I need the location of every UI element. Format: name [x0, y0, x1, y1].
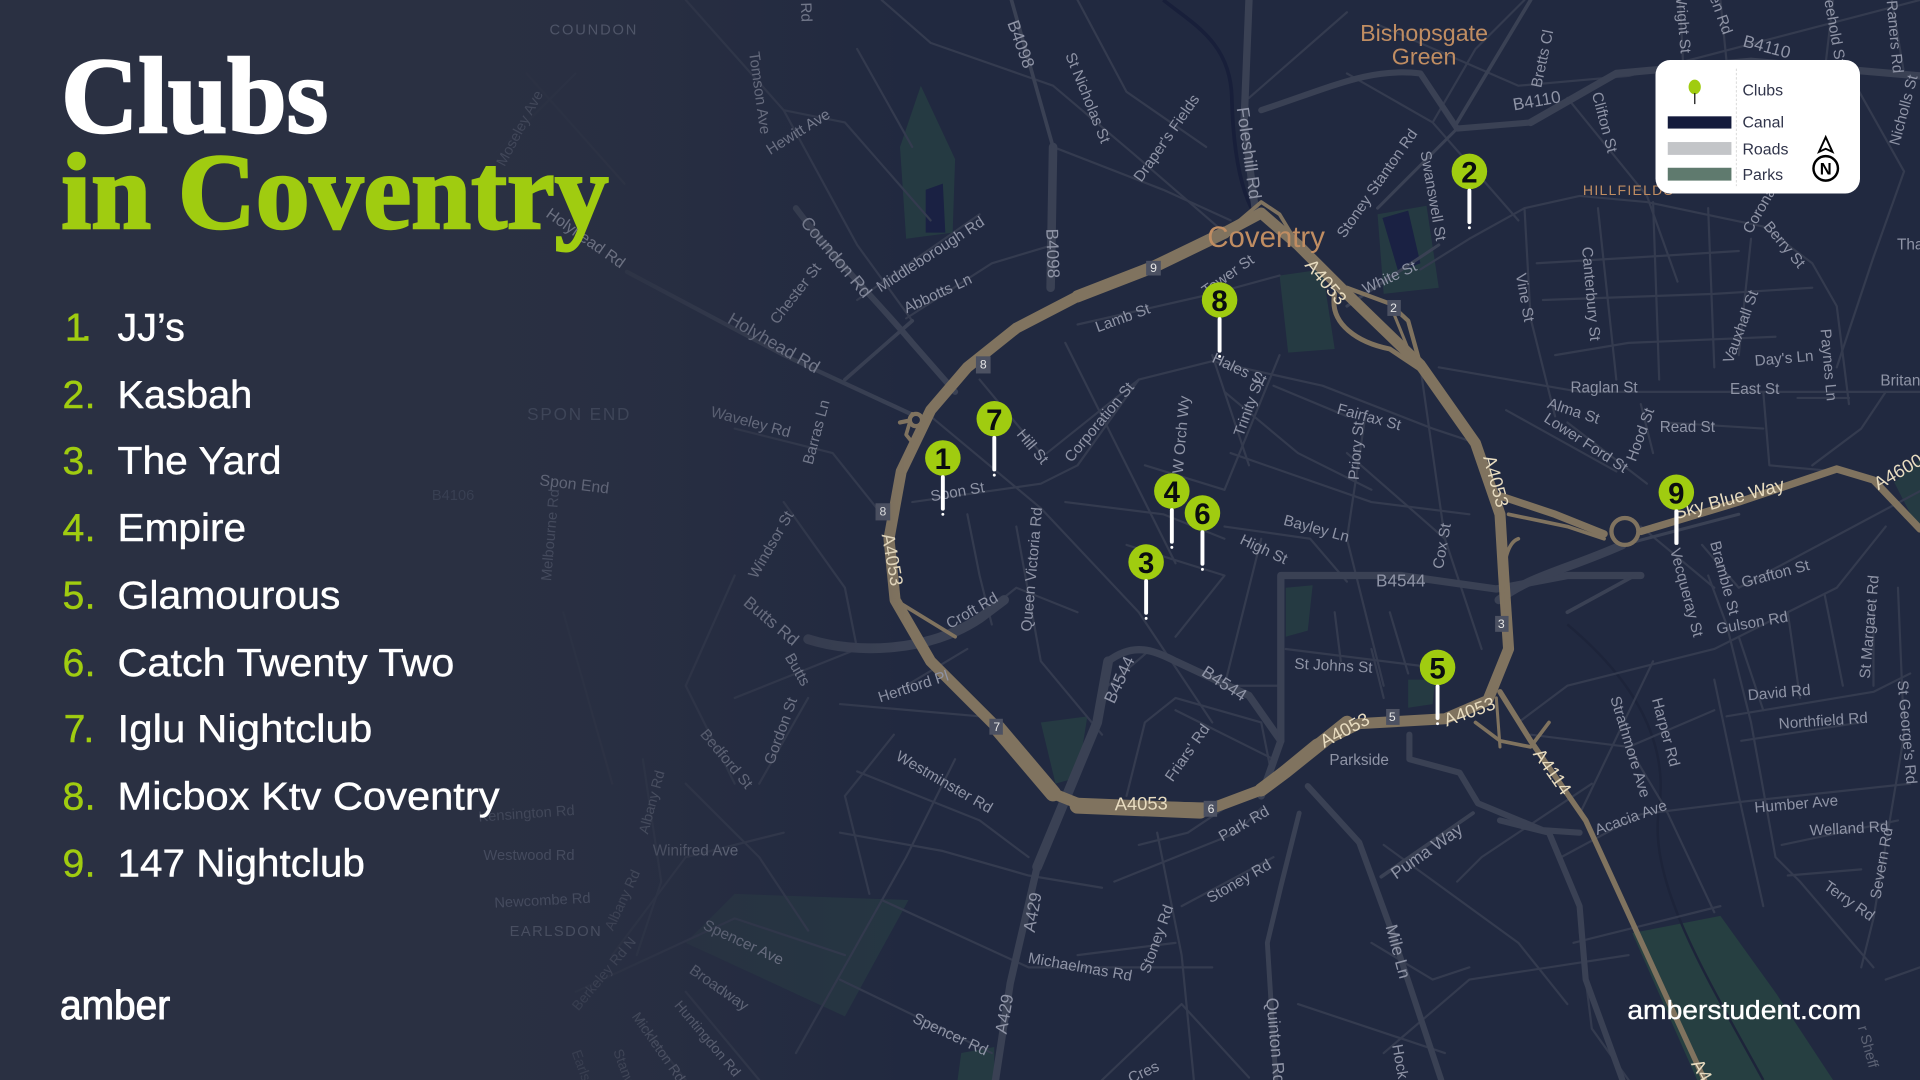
street labels: B4544	[1198, 661, 1251, 705]
street labels: B4110	[1741, 31, 1793, 62]
pin 5	[1420, 650, 1455, 725]
street labels: Tomson Ave	[745, 51, 773, 135]
junction number markers	[876, 261, 1509, 817]
list of clubs	[62, 306, 500, 886]
legend item: roads: Roads	[1742, 141, 1788, 158]
junction number markers: 8	[980, 358, 987, 372]
dimmed map labels: B4106	[432, 488, 474, 504]
street labels: Bramble St	[1706, 539, 1742, 617]
pin 6: 6	[1194, 498, 1211, 531]
street labels: Rd	[797, 2, 815, 22]
motorway labels: A4053	[878, 532, 908, 588]
motorway labels: A4053	[1114, 792, 1168, 814]
list of clubs: 4.	[62, 507, 96, 550]
parks	[686, 86, 1920, 1080]
street labels: Hill St	[1013, 426, 1052, 468]
street labels: Michaelmas Rd	[1027, 950, 1133, 985]
title	[61, 37, 609, 252]
street labels: Paynes Ln	[1817, 328, 1840, 402]
pin 1	[925, 440, 961, 516]
list of clubs: 9.	[62, 843, 96, 886]
street labels: St Nicholas St	[1061, 50, 1114, 146]
dimmed map labels: SPON END	[527, 404, 631, 424]
website url: amberstudent.com	[1627, 997, 1861, 1025]
street labels: St Margaret Rd	[1857, 575, 1883, 679]
street labels: Broadway	[686, 962, 752, 1015]
list of clubs: 8.	[62, 775, 96, 818]
icon: north arrow	[1813, 137, 1838, 181]
list of clubs: Empire	[118, 507, 246, 550]
junction number markers: 6	[1208, 802, 1215, 816]
icon: north arrow: N	[1820, 159, 1832, 178]
street labels: Friars' Rd	[1162, 721, 1214, 785]
street labels: Hood St	[1623, 405, 1659, 464]
street labels: High St	[1237, 531, 1291, 568]
pin 7: 7	[986, 404, 1002, 437]
list of clubs: 7.	[64, 708, 94, 751]
junction number markers: 7	[993, 720, 1000, 734]
list of clubs: Micbox Ktv Coventry	[118, 775, 500, 818]
street labels: Vecqueray St	[1666, 547, 1706, 640]
list of clubs: 2.	[62, 374, 96, 417]
list of clubs: 5.	[62, 575, 96, 618]
list of clubs: JJ’s	[118, 306, 185, 349]
junction number markers: 3	[1498, 617, 1505, 631]
dimmed map labels: Moseley Ave	[494, 88, 547, 169]
street labels: Puma Way	[1387, 819, 1467, 883]
motorway labels	[878, 255, 1920, 1080]
street labels: Tower St	[1199, 251, 1258, 300]
pin 8: 8	[1211, 285, 1228, 318]
motorway labels: A4053	[1479, 453, 1513, 510]
street labels: Abbotts Ln	[901, 271, 975, 317]
street labels: Albany Rd	[601, 867, 643, 933]
pin 3	[1128, 544, 1164, 620]
street labels: Huntingdon Rd	[671, 997, 744, 1079]
street labels: Lamb St	[1093, 300, 1153, 336]
street labels: Fairfax St	[1335, 401, 1404, 434]
street labels: B4098	[1003, 17, 1039, 71]
street labels: East St	[1730, 381, 1780, 398]
street labels: Priory St	[1346, 420, 1368, 481]
pin 2: 2	[1461, 156, 1478, 189]
street labels: Corona	[1740, 184, 1780, 237]
motorway labels: A4053	[1301, 255, 1351, 309]
street labels: Cox St	[1430, 521, 1455, 570]
dimmed map labels	[432, 23, 638, 940]
pin 2	[1452, 154, 1487, 229]
street labels: Stoney Rd	[1137, 903, 1177, 976]
street labels: Spencer Rd	[910, 1010, 990, 1059]
street labels: Middleborough Rd	[874, 214, 988, 296]
place names	[1207, 20, 1674, 254]
street labels: Britan	[1880, 372, 1920, 389]
motorway labels: Sky Blue Way	[1671, 473, 1787, 523]
street labels: A429	[991, 992, 1017, 1035]
street labels: Vine St	[1512, 272, 1537, 324]
A4053 ring road	[889, 202, 1920, 1080]
street labels: B4098	[1042, 228, 1064, 279]
street labels: Spencer Ave	[700, 917, 786, 969]
street labels: Grafton St	[1740, 557, 1812, 592]
list of clubs: 3.	[62, 440, 96, 483]
place names: Bishopsgate	[1360, 20, 1488, 46]
pin 7	[977, 401, 1012, 477]
dimmed map labels: EARLSDON	[510, 924, 602, 940]
street labels: Windsor St	[745, 508, 798, 582]
street labels: Canterbury St	[1578, 246, 1603, 342]
street labels: Vauxhall St	[1720, 288, 1763, 366]
street labels: Clifton St	[1588, 90, 1621, 155]
street labels: Gordon St	[761, 695, 801, 767]
junction number markers: 5	[1389, 710, 1396, 724]
pin 6	[1185, 495, 1220, 571]
place names: Green	[1392, 43, 1456, 69]
dimmed map labels: Spon End	[539, 472, 610, 498]
minor road network	[490, 0, 1920, 1080]
street labels: Croft Rd	[943, 589, 1001, 633]
dimmed map labels: Holyhead Rd	[543, 205, 628, 272]
street labels: Strathmore Ave	[1606, 694, 1653, 800]
street labels: Corporation St	[1061, 379, 1138, 466]
dimmed map labels: Newcombe Rd	[494, 891, 591, 912]
pin 3: 3	[1138, 547, 1154, 580]
street labels: Draper's Fields	[1131, 91, 1203, 185]
motorway labels: A4053	[1441, 692, 1498, 730]
street labels: r Sheff	[1854, 1024, 1881, 1071]
pin 4	[1154, 473, 1190, 549]
legend item: canal	[1668, 114, 1784, 131]
street labels: Berkeley Rd N	[568, 934, 639, 1013]
title line: Clubs: Clubs	[61, 37, 328, 156]
street labels: Spon St	[929, 479, 987, 505]
street labels: B4544	[1376, 570, 1426, 590]
pin 4: 4	[1164, 476, 1181, 509]
list of clubs: Iglu Nightclub	[118, 708, 372, 751]
street labels: Albany Rd	[635, 769, 668, 835]
list of clubs: 6.	[62, 642, 96, 685]
pin 5: 5	[1429, 652, 1446, 685]
street labels: Hewitt Ave	[763, 106, 833, 159]
street labels: Raglan St	[1570, 380, 1638, 397]
legend item: clubs: Clubs	[1742, 83, 1783, 100]
street labels: Butts Rd	[740, 592, 803, 650]
street labels: B4544	[1100, 653, 1139, 706]
street labels: Bretts Cl	[1528, 28, 1557, 89]
street labels: David Rd	[1747, 682, 1811, 704]
street labels: Humber Ave	[1754, 792, 1839, 817]
junction number markers: 9	[1150, 261, 1157, 275]
pin 9: 9	[1668, 477, 1684, 510]
title line: in Coventry: in Coventry	[61, 133, 609, 252]
street labels: W Orch Wy	[1170, 395, 1194, 474]
street labels: Parkside	[1329, 752, 1389, 769]
street labels: Raners Rd	[1883, 0, 1906, 74]
street labels: Bayley Ln	[1282, 512, 1351, 546]
list of clubs: Kasbah	[118, 374, 252, 417]
street labels: Queen Victoria Rd	[1018, 507, 1046, 632]
street labels: Park Rd	[1216, 803, 1272, 845]
street labels: Berry St	[1760, 218, 1809, 272]
street labels: Read St	[1660, 419, 1716, 436]
legend item: parks	[1668, 167, 1783, 184]
pin 9	[1659, 474, 1694, 545]
street labels: Butts	[781, 650, 813, 689]
street labels: Barras Ln	[800, 398, 834, 466]
street labels: Hock	[1388, 1043, 1411, 1080]
street labels: Day's Ln	[1754, 348, 1814, 370]
street labels: Waveley Rd	[709, 404, 792, 441]
left side fade panel	[0, 0, 906, 1080]
dimmed map labels: Westwood Rd	[483, 848, 575, 864]
major grey roads	[627, 0, 1920, 1080]
list of clubs: 1.	[65, 306, 92, 349]
street labels: A429	[1019, 891, 1046, 934]
street labels: Harper Rd	[1648, 696, 1683, 769]
legend	[1656, 60, 1860, 193]
list of clubs: Glamourous	[118, 575, 340, 618]
legend item: clubs	[1689, 80, 1783, 104]
street labels: Winifred Ave	[653, 843, 738, 860]
street labels: Terry Rd	[1820, 878, 1878, 925]
junction number markers: 2	[1390, 301, 1397, 315]
place names: HILLFIELDS	[1583, 182, 1674, 198]
pin 8	[1202, 282, 1237, 358]
street labels: Gulson Rd	[1715, 609, 1789, 638]
water: canal and lakes	[926, 0, 1763, 1080]
street labels: Alma St	[1545, 395, 1602, 428]
legend item: parks: Parks	[1742, 167, 1783, 184]
street labels: Northfield Rd	[1778, 710, 1868, 733]
junction number markers: 8	[879, 505, 886, 519]
street labels: Swanswell St	[1416, 150, 1449, 243]
street labels: White St	[1360, 258, 1420, 298]
street labels: Foleshill Rd	[1233, 106, 1265, 200]
motorway labels: A4053	[1316, 708, 1373, 752]
logo: amber: amber	[60, 982, 170, 1028]
list of clubs: The Yard	[118, 440, 282, 483]
roundabouts	[910, 414, 1638, 545]
list of clubs: 147 Nightclub	[118, 843, 365, 886]
street labels	[568, 0, 1920, 1080]
street labels: Holyhead Rd	[724, 309, 823, 377]
dimmed map labels: COUNDON	[550, 23, 638, 39]
street labels: Westminster Rd	[893, 748, 995, 817]
legend item: roads	[1668, 141, 1788, 158]
street labels: Chester St	[767, 260, 825, 328]
street labels: B4110	[1511, 86, 1562, 114]
street labels: Bedford St	[696, 726, 756, 793]
list of clubs: Catch Twenty Two	[118, 642, 454, 685]
street labels: Welland Rd	[1809, 818, 1889, 840]
dimmed map labels: Kensington Rd	[478, 803, 575, 826]
street labels: Acacia Ave	[1593, 797, 1669, 839]
street labels: Hertford Pl	[876, 668, 951, 706]
place names: Coventry	[1207, 221, 1325, 254]
street labels: Stoney Stanton Rd	[1334, 126, 1421, 241]
street labels: Hales St	[1209, 350, 1270, 390]
street labels: Coundon Rd	[797, 213, 876, 302]
motorway labels: A4114	[1529, 744, 1576, 799]
street labels: St Johns St	[1294, 656, 1374, 677]
street labels: Stoney Rd	[1204, 856, 1274, 907]
street labels: Severn Rd	[1867, 826, 1897, 900]
street labels: St George's Rd	[1894, 680, 1920, 785]
street labels: Mile Ln	[1382, 922, 1415, 981]
street labels: Lower Ford St	[1541, 410, 1631, 477]
pin 1: 1	[935, 443, 951, 476]
dimmed map labels: Melbourne Rd	[539, 488, 563, 582]
legend item: canal: Canal	[1742, 114, 1784, 131]
street labels: Trinity St	[1231, 376, 1267, 439]
